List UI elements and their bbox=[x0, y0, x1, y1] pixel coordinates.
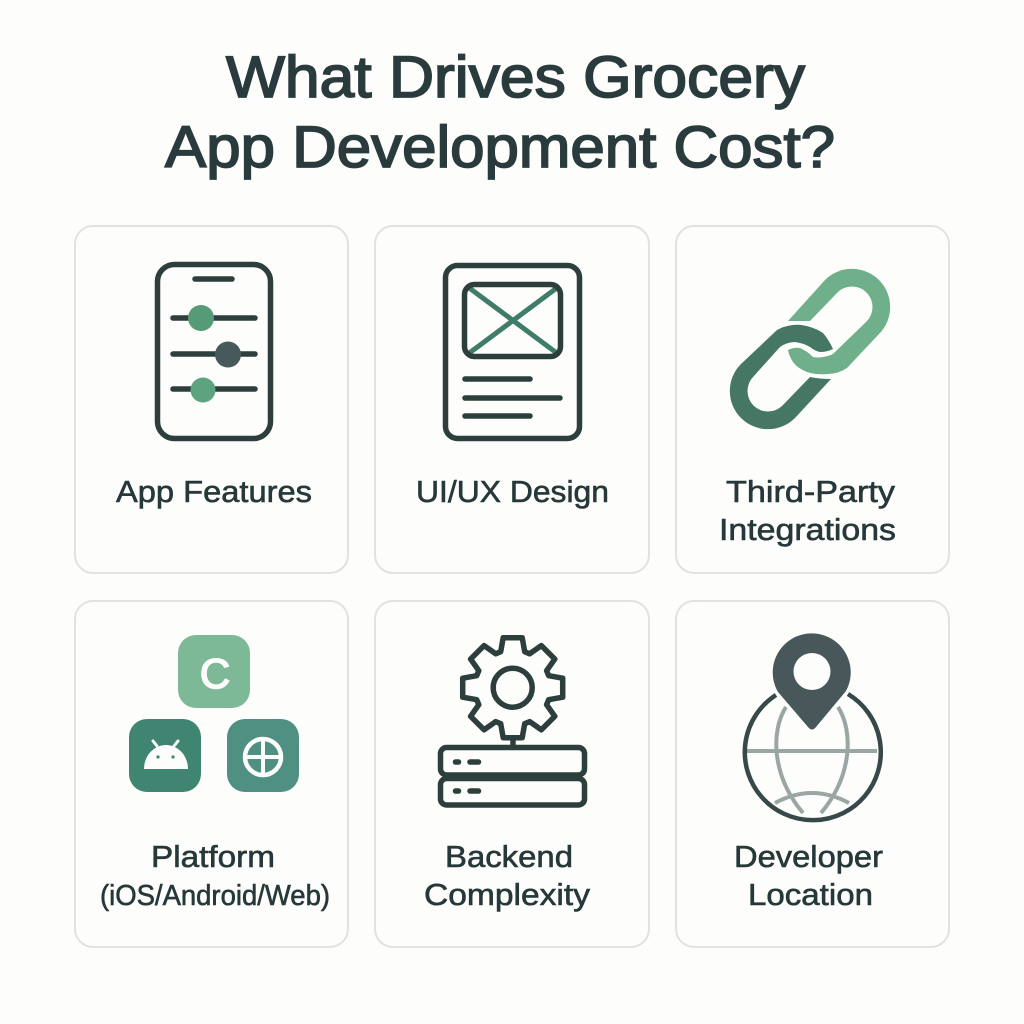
panel: UI/UX Design bbox=[375, 226, 649, 573]
label: Platform: (iOS/Android/Web) bbox=[100, 880, 330, 912]
title: What Drives Grocery bbox=[226, 45, 805, 110]
icon: chain links bbox=[730, 269, 890, 429]
label: UI/UX Design: UI/UX Design bbox=[416, 474, 609, 509]
title bbox=[165, 45, 835, 180]
panel: Backend Complexity bbox=[375, 601, 649, 947]
icon: platform tiles bbox=[129, 635, 299, 792]
label: Platform: Platform bbox=[151, 839, 275, 874]
icon: gear and server bbox=[440, 638, 584, 805]
icon: Android tile bbox=[129, 719, 201, 792]
icon: Web tile bbox=[227, 719, 299, 792]
label: Third-Party Integrations bbox=[719, 474, 896, 547]
label: Backend Complexity: Backend bbox=[445, 839, 573, 874]
icon: wireframe document bbox=[446, 266, 580, 438]
label: Platform bbox=[100, 839, 330, 912]
label: Backend Complexity: Complexity bbox=[424, 877, 591, 912]
panel: App Features bbox=[75, 226, 348, 573]
label: Developer Location: Developer bbox=[734, 839, 883, 874]
panel: Third-Party Integrations bbox=[676, 226, 949, 573]
icon: location pin on globe bbox=[745, 633, 881, 820]
icon: iOS tile: C bbox=[200, 650, 230, 697]
label: App Features: App Features bbox=[116, 474, 312, 509]
icon: phone with sliders bbox=[158, 264, 270, 438]
label: Third-Party Integrations: Integrations bbox=[719, 512, 896, 547]
label: Developer Location: Location bbox=[748, 877, 873, 912]
panel: Developer Location bbox=[676, 601, 949, 947]
label: Third-Party Integrations: Third-Party bbox=[726, 474, 896, 509]
icon: iOS tile bbox=[178, 635, 250, 708]
label: Backend Complexity bbox=[424, 839, 591, 912]
title: App Development Cost? bbox=[165, 115, 835, 180]
label: Developer Location bbox=[734, 839, 883, 912]
panel: Platform bbox=[75, 601, 348, 947]
